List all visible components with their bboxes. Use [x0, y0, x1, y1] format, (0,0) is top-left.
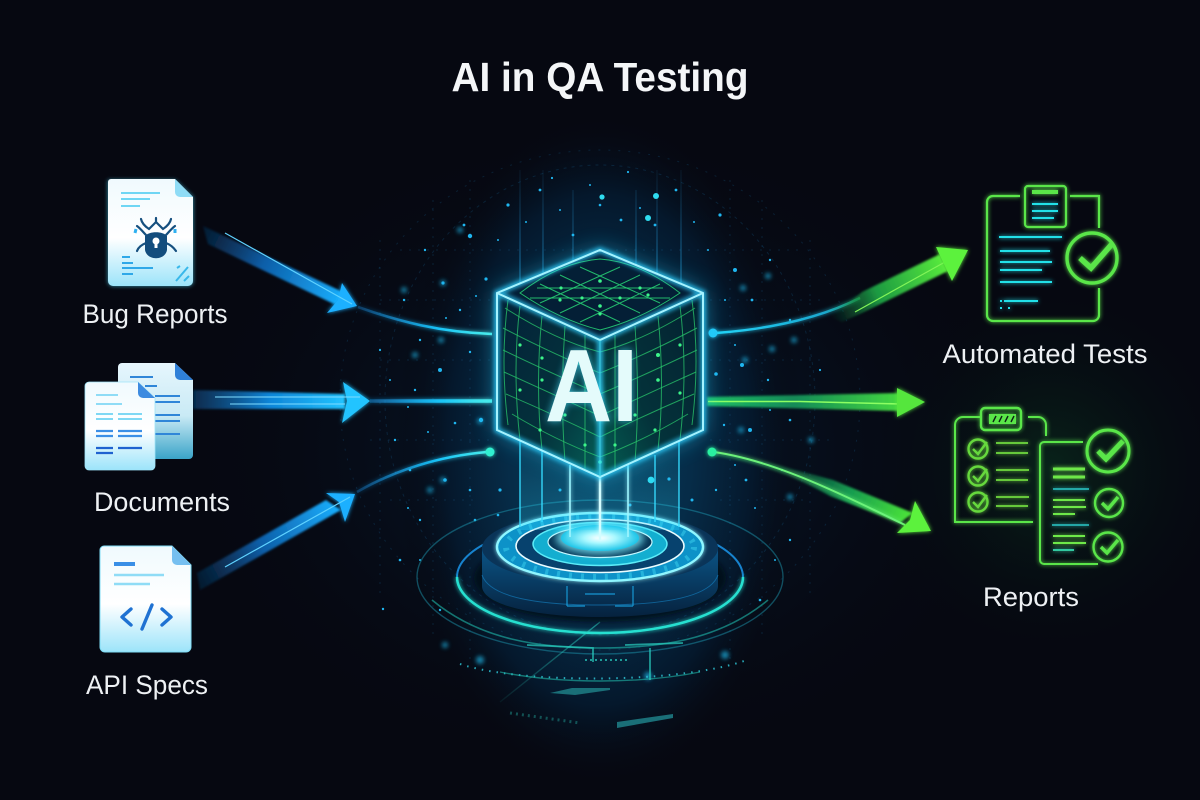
AI cube — [497, 250, 703, 477]
cube top face — [497, 250, 703, 340]
beams from platform to cube — [520, 440, 679, 540]
label: API specs: API Specs — [86, 670, 208, 700]
label: automated tests: Automated Tests — [942, 339, 1148, 369]
output arrow: automated tests — [708, 247, 968, 338]
icon: reports clipboards — [955, 408, 1129, 564]
particles — [379, 171, 821, 611]
outer rings — [417, 500, 783, 681]
input arrow: bug reports — [203, 226, 492, 334]
platform — [417, 500, 783, 728]
icon: automated tests clipboard — [987, 186, 1117, 321]
label: bug reports: Bug Reports — [82, 299, 228, 329]
icon: documents — [85, 363, 193, 470]
input arrow: API specs — [197, 448, 494, 590]
cube AI label: AI — [545, 328, 638, 443]
cube AI label: AI — [545, 328, 638, 443]
cube edges glow — [497, 250, 703, 477]
output arrow: reports middle — [707, 388, 925, 417]
beams above cube — [520, 170, 681, 320]
icon: API specs document — [100, 546, 191, 652]
label: documents: Documents — [94, 487, 230, 517]
circuit traces under platform — [500, 622, 683, 728]
decorative network arcs and grid — [340, 150, 860, 660]
title: AI in QA Testing — [452, 54, 748, 100]
soft light spots — [401, 227, 814, 680]
icon: bug report document — [108, 179, 193, 286]
input arrow: documents — [193, 382, 492, 423]
label: reports: Reports — [983, 582, 1079, 612]
output arrow: reports lower — [708, 448, 931, 533]
